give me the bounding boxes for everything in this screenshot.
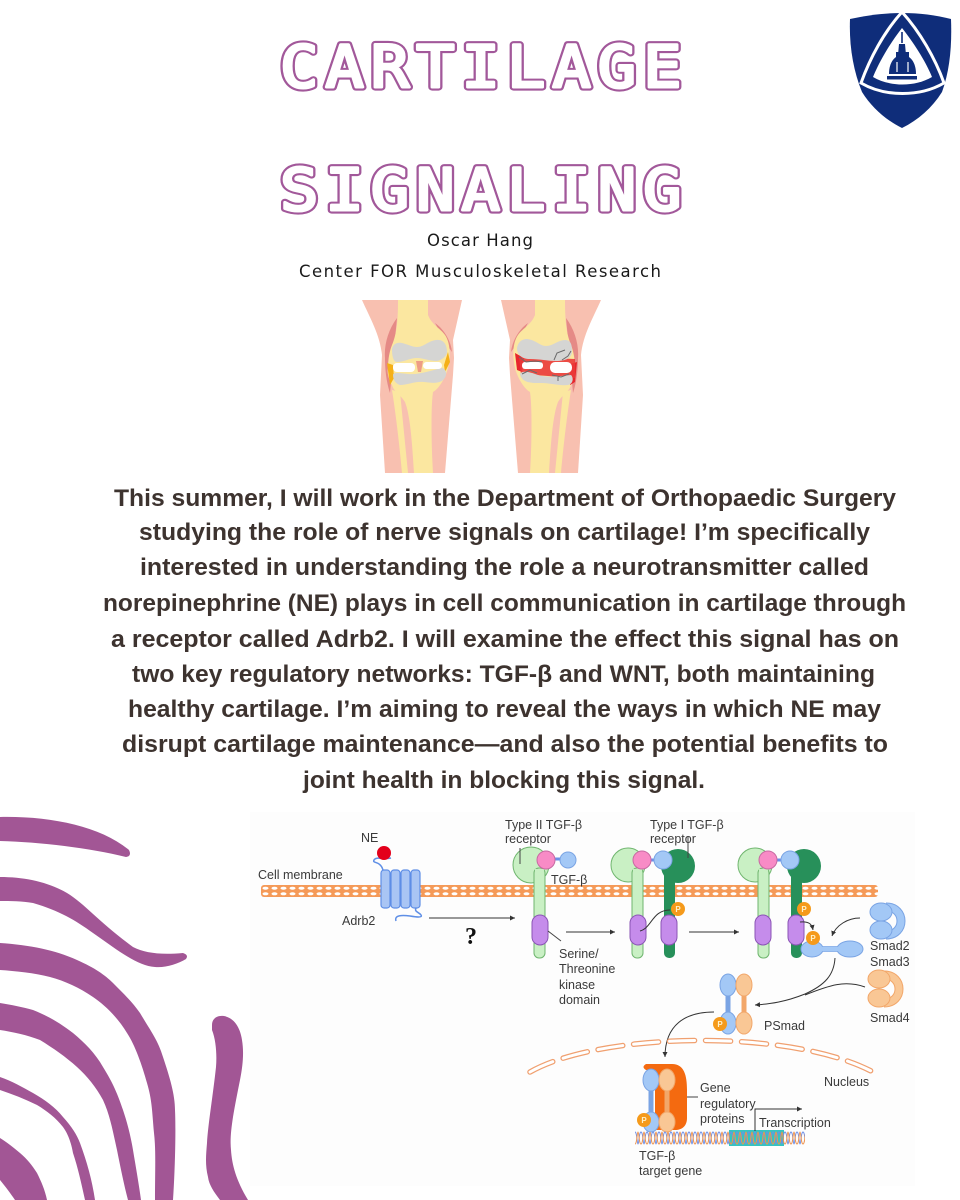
body paragraph: disrupt cartilage maintenance—and also the potential benefits to [122,731,888,758]
title: SIGNALING [280,157,682,224]
signalling arrows [665,918,865,1057]
gene regulation complex [637,1064,756,1132]
receptor stage 2: Type I TGF-β [650,818,724,832]
gene regulation complex: P [641,1116,647,1125]
receptor stage 1: kinase [559,978,595,992]
Smad2/Smad3 [870,903,910,969]
receptor stage 1: TGF-β [551,873,587,887]
Smad4 [868,970,910,1025]
pathway diagram [250,812,915,1186]
Adrb2 receptor with NE [342,831,421,928]
body paragraph: norepinephrine (NE) plays in cell communication in cartilage through [103,590,906,617]
PSmad dimer: PSmad [764,1019,805,1033]
body paragraph: interested in understanding the role a neurotransmitter called [140,554,869,581]
DNA target gene and transcription: target gene [639,1164,702,1178]
title: CARTILAGE [280,34,682,101]
Adrb2 receptor with NE: NE [361,831,378,845]
body paragraph: a receptor called Adrb2. I will examine the effect this signal has on [111,626,899,653]
connecting arrow [566,931,615,933]
receptor stage 1: receptor [505,832,551,846]
receptor stage 2: receptor [650,832,696,846]
DNA target gene and transcription [635,1109,831,1178]
receptor stage 1: Threonine [559,962,615,976]
PSmad dimer: P [717,1020,723,1029]
cell membrane: Cell membrane [258,868,343,882]
receptor stage 2 [611,818,724,958]
PSmad dimer [713,974,805,1034]
decorative purple swirls [0,817,248,1200]
receptor stage 1: domain [559,993,600,1007]
arrow with question mark: ? [465,924,477,950]
title: CARTILAGE [280,34,682,101]
author and affiliation [299,231,661,281]
nuclear membrane: Nucleus [824,1075,869,1089]
body paragraph: joint health in blocking this signal. [302,767,705,794]
body paragraph: two key regulatory networks: TGF-β and WNT, both maintaining [132,661,875,688]
title: SIGNALING [280,157,682,224]
gene regulation complex: proteins [700,1112,744,1126]
illustration: arthritic knee [501,300,601,473]
body paragraph: healthy cartilage. I’m aiming to reveal the ways in which NE may [128,696,882,723]
body paragraph: This summer, I will work in the Department of Orthopaedic Surgery [114,485,897,512]
illustration: healthy knee [362,300,462,473]
nuclear membrane [530,1040,873,1089]
logo: university shield [850,12,951,128]
body paragraph: studying the role of nerve signals on cartilage! I’m specifically [139,519,871,546]
cell membrane [258,868,878,897]
Adrb2 receptor with NE: Adrb2 [342,914,375,928]
connecting arrow [689,931,739,933]
gene regulation complex: regulatory [700,1097,756,1111]
receptor stage 3: P [810,934,816,943]
gene regulation complex: Gene [700,1081,731,1095]
receptor stage 2: P [675,905,681,914]
Smad2/Smad3: Smad2 [870,939,910,953]
title [280,34,682,224]
DNA target gene and transcription: Transcription [759,1116,831,1130]
author and affiliation: Oscar Hang [427,231,533,250]
arrow with question mark [429,918,515,950]
DNA target gene and transcription: TGF-β [639,1149,675,1163]
body paragraph [103,485,906,794]
receptor stage 3 [738,848,863,958]
receptor stage 3: P [801,905,807,914]
receptor stage 1 [505,818,615,1007]
author and affiliation: Center FOR Musculoskeletal Research [299,262,661,281]
Smad4: Smad4 [870,1011,910,1025]
receptor stage 1: Type II TGF-β [505,818,582,832]
receptor stage 1: Serine/ [559,947,599,961]
Smad2/Smad3: Smad3 [870,955,910,969]
